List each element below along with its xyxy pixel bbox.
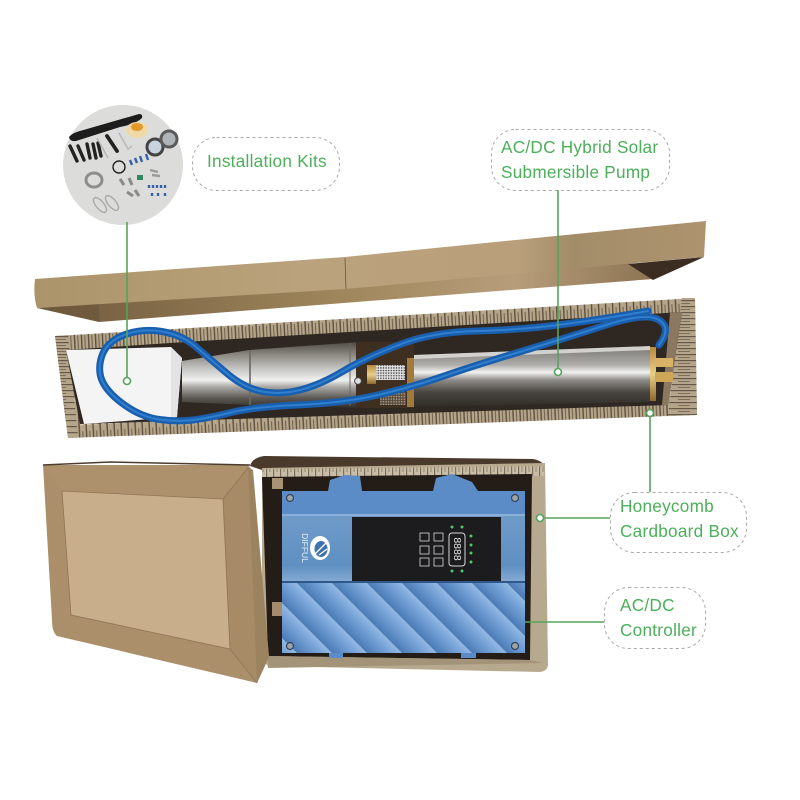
label: installation kits bbox=[192, 138, 340, 190]
label: AC/DC controller bbox=[604, 588, 706, 648]
logo bbox=[300, 533, 330, 563]
label: honeycomb cardboard box: Cardboard Box bbox=[620, 521, 739, 541]
controller bbox=[282, 474, 525, 658]
leader: pump bbox=[554, 190, 562, 376]
label: AC/DC hybrid solar submersible pump: AC/DC Hybrid Solar bbox=[501, 137, 658, 157]
white packing box bbox=[66, 347, 182, 424]
blue cable bbox=[100, 311, 666, 421]
long honeycomb cardboard box bbox=[55, 298, 697, 438]
pump bbox=[182, 342, 673, 408]
honeycomb box lid, top bbox=[34, 221, 706, 322]
label: AC/DC controller: Controller bbox=[620, 620, 697, 640]
open box flap, left bbox=[43, 462, 269, 683]
icon: installation kits photo bbox=[63, 105, 183, 225]
leader: controller bbox=[525, 621, 604, 623]
display panel: 8888 bbox=[451, 537, 463, 561]
display panel bbox=[352, 517, 501, 581]
leader: honeycomb box bbox=[646, 410, 654, 492]
logo: DIFFUL bbox=[300, 533, 310, 563]
leader: installation kits bbox=[124, 222, 130, 384]
label: AC/DC controller: AC/DC bbox=[620, 595, 675, 615]
label: honeycomb cardboard box: Honeycomb bbox=[620, 496, 714, 516]
leader: box edge bbox=[536, 514, 610, 522]
label: installation kits: Installation Kits bbox=[207, 151, 327, 171]
label: honeycomb cardboard box bbox=[610, 492, 746, 552]
controller box body bbox=[250, 456, 548, 672]
label: AC/DC hybrid solar submersible pump bbox=[492, 130, 670, 190]
label: AC/DC hybrid solar submersible pump: Submersible Pump bbox=[501, 162, 650, 182]
